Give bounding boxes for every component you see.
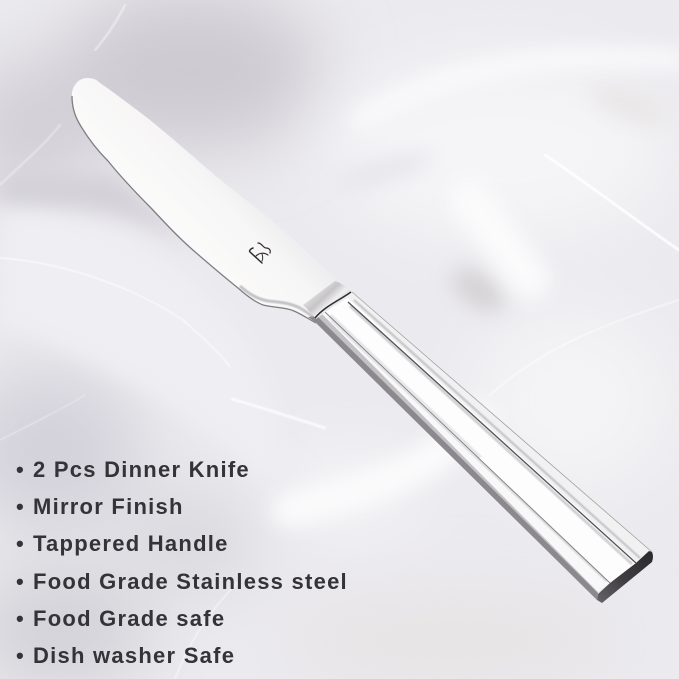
feature: Food Grade safe: • bbox=[16, 606, 25, 631]
feature: Food Grade Stainless steel: Food Grade Stainless steel bbox=[33, 569, 348, 594]
handle upper panel bbox=[349, 292, 652, 563]
feature: Tappered Handle: Tappered Handle bbox=[33, 531, 229, 556]
feature: Food Grade Stainless steel: • bbox=[16, 569, 25, 594]
feature: Dish washer Safe: Dish washer Safe bbox=[33, 643, 235, 668]
feature: Mirror Finish: Mirror Finish bbox=[33, 494, 184, 519]
band above the left feather bbox=[0, 175, 195, 250]
feature: 2 Pcs Dinner Knife: 2 Pcs Dinner Knife bbox=[33, 457, 250, 482]
feature: Food Grade safe: Food Grade safe bbox=[33, 606, 225, 631]
handle end cap bbox=[597, 551, 653, 603]
handle lower bevel bbox=[308, 316, 598, 600]
handle grooves bbox=[348, 302, 636, 563]
knife handle bbox=[308, 292, 653, 603]
knife bolster bbox=[303, 281, 352, 319]
feature: Tappered Handle: • bbox=[16, 531, 25, 556]
handle body bbox=[315, 292, 652, 603]
knife bbox=[72, 78, 653, 603]
knife blade bbox=[72, 78, 352, 323]
feature: Mirror Finish: • bbox=[16, 494, 25, 519]
feature list bbox=[16, 457, 348, 668]
blade logo bbox=[250, 243, 270, 263]
feather highlights bbox=[280, 60, 670, 525]
feature: 2 Pcs Dinner Knife: • bbox=[16, 457, 25, 482]
feature: Dish washer Safe: • bbox=[16, 643, 25, 668]
feather barbs bbox=[290, 58, 679, 510]
handle center panel bbox=[325, 298, 638, 583]
handle lower panel bbox=[322, 312, 610, 592]
blade lower bevel bbox=[72, 96, 316, 323]
feather shadows bbox=[335, 78, 672, 321]
large left feather bbox=[0, 205, 282, 490]
